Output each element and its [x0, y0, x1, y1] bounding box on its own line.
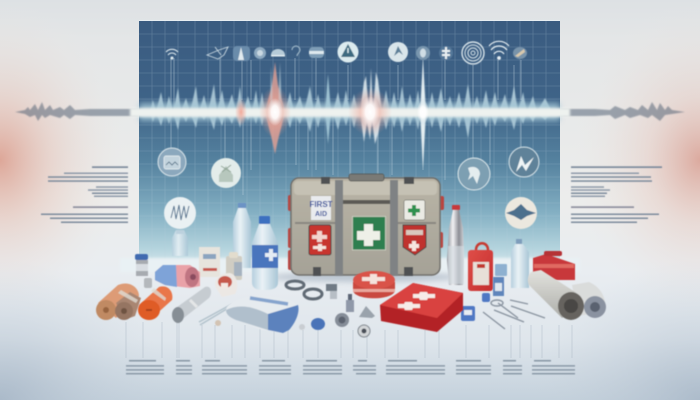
grey rolled mats	[528, 270, 606, 320]
pill bottle	[226, 252, 242, 280]
icon: waveform badge	[164, 197, 196, 229]
tweezers and small items	[199, 304, 232, 326]
icon: wifi large	[489, 41, 509, 59]
icon: emblem circle	[388, 42, 408, 62]
white carton	[199, 247, 220, 277]
case lid band	[294, 181, 437, 195]
panel: seismograph grid	[139, 20, 560, 265]
icon: wifi small	[166, 49, 178, 59]
waveform glow points	[235, 98, 247, 126]
sticker: first aid label: AID	[315, 211, 327, 218]
tan roll	[96, 283, 139, 320]
caption 3	[202, 360, 247, 374]
case side latches	[288, 195, 444, 270]
green cross sign	[352, 216, 386, 250]
grey clamp	[286, 281, 322, 299]
dropper bottle	[346, 294, 354, 312]
icon: shield badge	[416, 46, 430, 60]
sticker: first aid label: FIRST	[309, 200, 333, 209]
icon: warning triangle	[338, 42, 358, 62]
case clips	[295, 177, 436, 276]
icon: kit badge	[158, 148, 186, 176]
caption 9	[503, 360, 522, 374]
icon: bird outline	[207, 47, 228, 59]
red cross bandage wrap	[215, 273, 237, 297]
icon: lens	[513, 47, 527, 59]
top icon row	[166, 41, 527, 64]
caption 8	[456, 360, 491, 374]
orange bandage rolls	[96, 283, 172, 320]
red toolkit	[533, 251, 575, 280]
small pebble	[299, 324, 305, 330]
case straps	[335, 180, 398, 276]
caption 10	[532, 360, 575, 374]
metal instruments	[483, 300, 545, 329]
main peak spikes	[265, 60, 426, 168]
grey tube	[172, 287, 211, 323]
icon: cross badge	[439, 46, 453, 60]
red round tin	[353, 271, 395, 298]
bottle far left	[172, 230, 188, 256]
medicine boxes	[135, 247, 242, 288]
metal nut	[358, 325, 370, 337]
case body	[291, 178, 440, 275]
caption 5	[303, 360, 342, 374]
lower icon circles	[158, 147, 539, 229]
caption 4	[259, 360, 291, 374]
case seam	[343, 200, 390, 204]
case handle	[349, 174, 384, 181]
icon: house badge	[211, 158, 241, 188]
bottom caption lines	[126, 360, 575, 374]
icon: swirl badge	[458, 158, 490, 190]
right water bottle	[511, 239, 529, 288]
waveform spikes	[150, 84, 552, 138]
icon: pill bar	[309, 47, 324, 58]
blue cap	[311, 318, 325, 330]
small blue boxes	[461, 293, 490, 321]
first aid case	[288, 174, 444, 276]
icon: dome	[271, 49, 285, 56]
sticker: red cross left	[309, 225, 331, 255]
left text lines	[41, 166, 128, 223]
bottom leader lines	[126, 322, 572, 358]
blue and pink roll	[155, 265, 200, 288]
left water bottles	[172, 203, 278, 290]
orange roll	[138, 286, 172, 320]
caption 6	[353, 360, 376, 374]
small vial	[326, 284, 337, 299]
caption 2	[176, 360, 192, 374]
icon: round seal	[254, 47, 266, 59]
brown roll	[115, 292, 141, 320]
red first aid pouch	[380, 283, 463, 332]
icon: concentric target	[462, 42, 484, 64]
bottle tall	[233, 203, 251, 268]
icon: tower badge	[233, 46, 250, 61]
right steel bottle	[447, 205, 464, 285]
sticker: red shield	[403, 225, 426, 255]
red carrying box	[468, 243, 493, 291]
grey cap	[335, 313, 349, 327]
caption 1	[126, 360, 164, 374]
small vial left	[144, 278, 152, 288]
right text lines	[571, 166, 662, 223]
icon: check badge	[509, 147, 539, 177]
grey tag	[359, 306, 375, 318]
bottle large	[252, 216, 278, 290]
seismic waveform	[15, 60, 685, 168]
waveform tails	[15, 102, 139, 121]
small blue bottle	[493, 264, 507, 296]
sticker: first aid label	[309, 196, 333, 220]
folded blue blanket	[226, 295, 299, 333]
icon connector lines	[171, 58, 521, 195]
blue capped jar	[135, 254, 148, 276]
waveform band	[139, 103, 560, 121]
icon: wave badge	[505, 197, 537, 229]
panel floor fade	[120, 258, 580, 272]
bandage ties	[118, 288, 166, 303]
icon: hook glyph	[292, 46, 300, 56]
sticker: green cross	[404, 200, 425, 220]
floor shadow	[270, 272, 460, 282]
small grey parts	[286, 281, 375, 337]
caption 7	[386, 360, 445, 374]
